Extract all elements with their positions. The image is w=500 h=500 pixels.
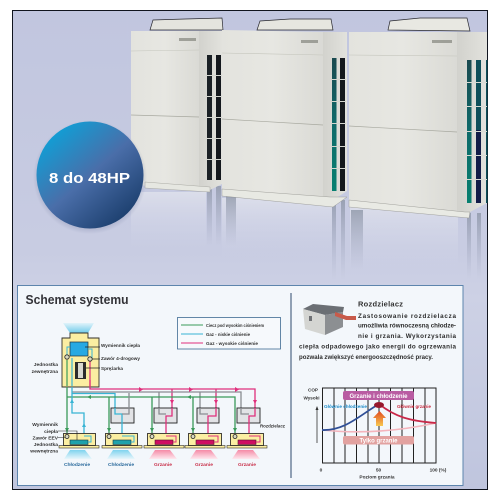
legend: Gaz - niskie ciśnienie [206, 332, 250, 338]
heading: system schematic: Schemat systemu [26, 292, 129, 307]
curve: mainly heating [379, 404, 436, 423]
axis arrow [316, 406, 318, 443]
indoor unit 1: cooling [59, 434, 99, 459]
badge: capacity range: 8 do 48HP [49, 170, 130, 187]
outdoor unit 3 [349, 18, 488, 218]
indoor unit 2: cooling [102, 434, 142, 459]
badge shadow [33, 120, 147, 234]
outdoor unit schematic [62, 333, 100, 387]
legend: Ciecz pod wysokim ciśnieniem [206, 323, 264, 329]
heading: distributor: Rozdzielacz [358, 300, 403, 308]
chart: COP vs heating level [304, 388, 447, 480]
outdoor unit 2 [222, 19, 347, 207]
outdoor unit fan airflow [63, 323, 94, 333]
curve: heating only [322, 423, 436, 432]
diagram labels: Chłodzenie [64, 462, 90, 468]
x-axis ticks: 100 (%) [430, 468, 447, 474]
distributor inner piping [115, 393, 255, 433]
icon: upward arrow [373, 411, 386, 426]
diagram labels: zewnętrzna [32, 369, 58, 375]
label bar: heating and cooling: Grzanie i chłodzenie [349, 394, 408, 400]
legend [178, 318, 280, 349]
text block: distributor description: ciepła odpadowego jako energii do ogrzewania [299, 344, 456, 350]
x-axis ticks: 0 [320, 468, 323, 474]
diagram labels: Wymiennik [32, 422, 58, 428]
diagram labels: wewnętrzna [29, 448, 58, 454]
legend: Gaz - wysokie ciśnienie [206, 341, 258, 347]
indoor unit 5: heating [227, 434, 267, 459]
diagram labels: Zawór 4-drogowy [101, 356, 140, 362]
label bar: heating and cooling [343, 391, 414, 400]
diagram labels: Zawór EEV [32, 436, 59, 442]
text block: distributor description: nie i grzania. Wykorzystania [358, 333, 456, 340]
text block: distributor description: Zastosowanie rozdzielacza [358, 313, 456, 320]
curve: mainly cooling [322, 404, 379, 430]
diagram labels [29, 343, 285, 468]
x-axis title: Poziom grzania [359, 474, 395, 480]
indoor unit 3: heating [144, 434, 184, 459]
diagram labels: Sprężarka [101, 366, 123, 372]
peak marker [374, 402, 384, 408]
diagram labels: Jednostka [34, 362, 58, 368]
flow arrows [65, 387, 257, 432]
refrigerant pipes [67, 380, 255, 436]
text block: distributor description [299, 313, 456, 361]
text block: distributor description: umożliwia równoczesną chłodze- [358, 322, 456, 330]
label bar: heating only: Tylko grzanie [360, 438, 398, 444]
diagram labels: Rozdzielacz [260, 424, 285, 430]
diagram labels: Grzanie [238, 462, 256, 468]
indoor unit 4: heating [185, 434, 225, 459]
diagram: refrigerant system [58, 323, 267, 459]
label bar: heating only [343, 436, 414, 444]
axis label: COP: COP [308, 388, 318, 392]
diagram labels: Jednostka [34, 442, 58, 448]
icon: distributor unit [303, 304, 356, 335]
text block: distributor description: pozwala zwiększyć energooszczędność pracy. [299, 354, 433, 361]
curve label: mainly heating: Głównie grzanie [397, 404, 431, 410]
badge: capacity range [36, 122, 144, 228]
panel divider [290, 293, 292, 478]
x-axis ticks [320, 468, 447, 474]
curve label: mainly cooling: Głównie chłodzenie [324, 404, 367, 410]
diagram labels: Chłodzenie [108, 462, 134, 468]
leader lines for indoor labels [58, 431, 77, 440]
diagram labels: Wymiennik ciepła [101, 343, 140, 349]
chart grid [322, 388, 436, 463]
diagram labels: Grzanie [195, 462, 213, 468]
outdoor unit 1 [131, 18, 223, 192]
diagram labels: ciepła [44, 429, 58, 435]
x-axis ticks: 50 [376, 468, 381, 474]
reflections of the outdoor units [131, 186, 481, 280]
distributor boxes [111, 408, 260, 423]
axis label: high: Wysoki [304, 396, 320, 400]
diagram labels: Grzanie [154, 462, 172, 468]
panel: system information [18, 286, 463, 486]
